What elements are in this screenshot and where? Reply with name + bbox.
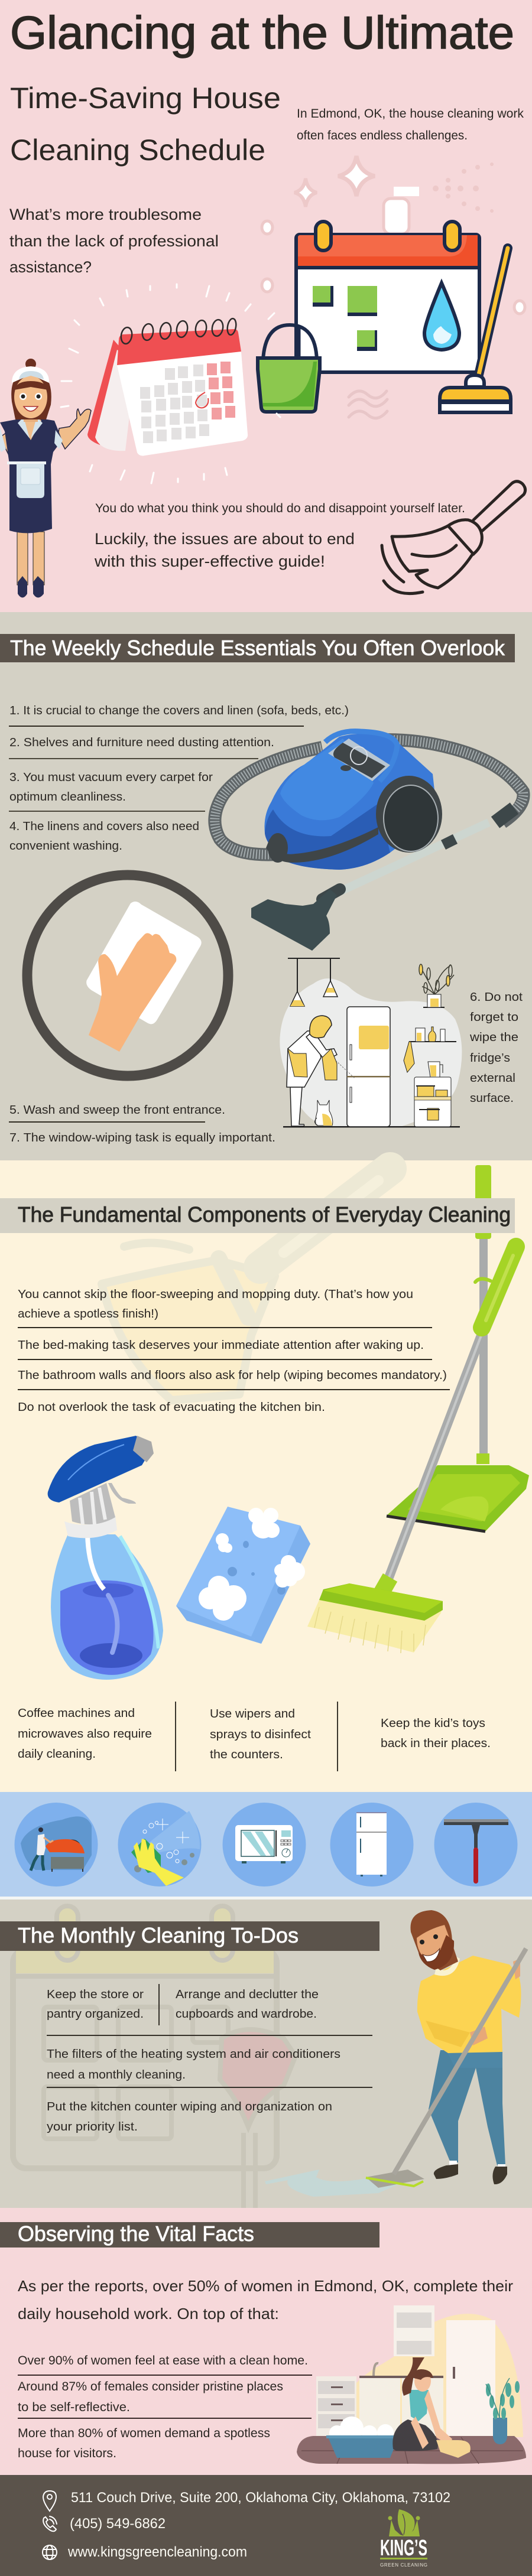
icon: soapy sponge: [176, 1507, 310, 1644]
icon: globe: [43, 2545, 57, 2559]
text columns: appliances, wipers, toys: [18, 1702, 491, 1771]
text: disappoint yourself: You do what you think you should do and disappoint yourself later.: [95, 502, 465, 515]
monthly list: Keep the store or: [47, 1988, 144, 2001]
facts list: daily household work. On top of that:: [18, 2305, 279, 2323]
heading band: vital facts: Observing the Vital Facts: [18, 2222, 254, 2246]
text columns: appliances, wipers, toys: daily cleaning.: [18, 1747, 96, 1761]
heading band: monthly: The Monthly Cleaning To-Dos: [18, 1923, 299, 1947]
text columns: appliances, wipers, toys: Keep the kid’s toys: [381, 1716, 485, 1730]
monthly list: need a monthly cleaning.: [47, 2068, 186, 2081]
text: guide promise: Luckily, the issues are about to end: [95, 530, 355, 548]
watermark: faded brush: [102, 1169, 390, 1400]
text: troublesome question: [9, 206, 219, 276]
text: Edmond challenges: [297, 107, 524, 142]
everyday list: You cannot skip the floor-sweeping and mopping duty. (That’s how you: [18, 1287, 413, 1301]
icon: squeegee: [434, 1803, 518, 1887]
icon: water drop: [424, 283, 459, 350]
text: item 6 fridge: wipe the: [469, 1030, 518, 1044]
icon: mop: [440, 248, 511, 412]
text: item 6 fridge: 6. Do not: [470, 990, 523, 1004]
logo: King's Green Cleaning: KING’S: [380, 2536, 427, 2561]
icon: maid character: [0, 359, 91, 598]
checklist items 1 to 4: 4. The linens and covers also need: [9, 819, 199, 833]
text: item 6 fridge: forget to: [470, 1010, 518, 1024]
subtitle: [10, 82, 281, 167]
panel: monthly cleaning: [0, 1900, 532, 2208]
contact: phone number: (405) 549-6862: [70, 2516, 166, 2532]
panel: weekly schedule essentials: [0, 612, 532, 1160]
monthly list: The filters of the heating system and air conditioners: [47, 2047, 340, 2061]
icon: spray bottle: [48, 1436, 163, 1680]
text columns: appliances, wipers, toys: Use wipers and: [210, 1707, 295, 1720]
text: item 6 fridge: external: [470, 1071, 515, 1085]
heading band: monthly: [0, 1921, 379, 1951]
icon: sparkles and spray behind large calendar: [262, 156, 525, 314]
text: troublesome question: assistance?: [9, 258, 92, 276]
checklist items 5 and 7: 5. Wash and sweep the front entrance.: [9, 1103, 225, 1117]
contact: website: www.kingsgreencleaning.com: [67, 2544, 247, 2560]
everyday list: The bathroom walls and floors also ask for help (wiping becomes mandatory.): [18, 1368, 447, 1382]
watermark: faded calendar: [13, 1906, 296, 2208]
heading band: weekly schedule: The Weekly Schedule Essentials You Often Overlook: [10, 636, 505, 660]
icon: vacuum cleaner: [215, 731, 524, 951]
panel: vital facts: [0, 2208, 532, 2475]
monthly list: your priority list.: [47, 2120, 138, 2133]
text: troublesome question: What’s more troublesome: [9, 206, 202, 223]
facts list: Over 90% of women feel at ease with a clean home.: [18, 2354, 308, 2367]
heading band: fundamental components: [0, 1198, 515, 1233]
facts list: [18, 2277, 513, 2460]
monthly list: Arrange and declutter the: [176, 1988, 319, 2001]
facts list: Around 87% of females consider pristine places: [18, 2380, 283, 2393]
icon: phone: [43, 2516, 57, 2531]
icon: microwave: [222, 1803, 306, 1887]
icon: white rays around small calendar: [61, 284, 280, 483]
panel: introduction: [0, 0, 532, 612]
checklist items 1 to 4: optimum cleanliness.: [9, 790, 126, 804]
icon: woman making bed: [14, 1803, 98, 1887]
subtitle: Cleaning Schedule: [10, 134, 265, 167]
text: troublesome question: than the lack of professional: [9, 232, 219, 250]
icon: large wall calendar with bucket and mop: [258, 222, 511, 412]
logo: King's Green Cleaning: [380, 2509, 427, 2568]
icon: small desk calendar: [87, 318, 248, 456]
checklist items 1 to 4: [9, 704, 349, 853]
text columns: appliances, wipers, toys: sprays to disinfect: [210, 1728, 311, 1741]
heading band: vital facts: [0, 2222, 379, 2248]
panel: blue icon band: [0, 1792, 532, 1900]
icon: bucket: [258, 325, 320, 412]
everyday list: achieve a spotless finish!): [18, 1307, 158, 1320]
monthly list: pantry organized.: [47, 2007, 144, 2021]
monthly list: [47, 1984, 372, 2133]
icon: location pin: [43, 2491, 56, 2511]
facts list: to be self-reflective.: [18, 2401, 130, 2414]
checklist items 1 to 4: 1. It is crucial to change the covers and linen (sofa, beds, etc.): [9, 704, 349, 717]
text: item 6 fridge: surface.: [470, 1091, 514, 1105]
text: Edmond challenges: often faces endless challenges.: [297, 129, 468, 142]
text: Edmond challenges: In Edmond, OK, the house cleaning work: [297, 107, 524, 121]
title: Glancing at the Ultimate: [10, 6, 514, 58]
checklist items 1 to 4: 3. You must vacuum every carpet for: [9, 770, 213, 784]
facts list: More than 80% of women demand a spotless: [18, 2427, 270, 2440]
icon: woman cleaning fridge in kitchen: [280, 958, 462, 1127]
everyday list: [18, 1287, 450, 1414]
heading band: fundamental components: The Fundamental Components of Everyday Cleaning: [18, 1202, 511, 1227]
icon: line-art brush: [382, 482, 525, 594]
checklist items 1 to 4: convenient washing.: [9, 839, 122, 853]
text columns: appliances, wipers, toys: back in their places.: [381, 1736, 491, 1750]
checklist items 5 and 7: [9, 1103, 275, 1144]
text: item 6 fridge: fridge’s: [470, 1051, 510, 1065]
panel: fundamental components: [0, 1160, 532, 1792]
text columns: appliances, wipers, toys: Coffee machines and: [18, 1706, 135, 1720]
everyday list: Do not overlook the task of evacuating the kitchen bin.: [18, 1400, 325, 1414]
everyday list: The bed-making task deserves your immediate attention after waking up.: [18, 1338, 424, 1352]
icon: dustpan and broom: [307, 1165, 529, 1653]
monthly list: Put the kitchen counter wiping and organization on: [47, 2100, 332, 2113]
facts list: house for visitors.: [18, 2447, 116, 2460]
text columns: appliances, wipers, toys: the counters.: [210, 1748, 283, 1761]
checklist items 1 to 4: 2. Shelves and furniture need dusting attention.: [9, 736, 274, 749]
text: item 6 fridge: [469, 990, 523, 1105]
illustration: woman scrubbing floor: [297, 2305, 526, 2464]
text: guide promise: with this super-effective guide!: [94, 552, 325, 570]
icon: refrigerator: [330, 1803, 414, 1887]
icon: gloved hand with bubbles: [118, 1803, 201, 1887]
text: guide promise: [94, 530, 355, 570]
panel: footer contact: [0, 2475, 532, 2576]
logo: King's Green Cleaning: GREEN CLEANING: [380, 2562, 427, 2568]
icon: hand wiping circle: [27, 875, 228, 1076]
contact: address: 511 Couch Drive, Suite 200, Oklahoma City, Oklahoma, 73102: [71, 2490, 450, 2506]
facts list: As per the reports, over 50% of women in Edmond, OK, complete their: [18, 2277, 513, 2295]
text columns: appliances, wipers, toys: microwaves also require: [18, 1727, 152, 1741]
icon: waves: [349, 391, 387, 418]
monthly list: cupboards and wardrobe.: [176, 2007, 317, 2021]
illustration: bearded man mopping: [265, 1910, 526, 2197]
subtitle: Time-Saving House: [10, 82, 281, 115]
checklist items 5 and 7: 7. The window-wiping task is equally important.: [9, 1131, 275, 1144]
